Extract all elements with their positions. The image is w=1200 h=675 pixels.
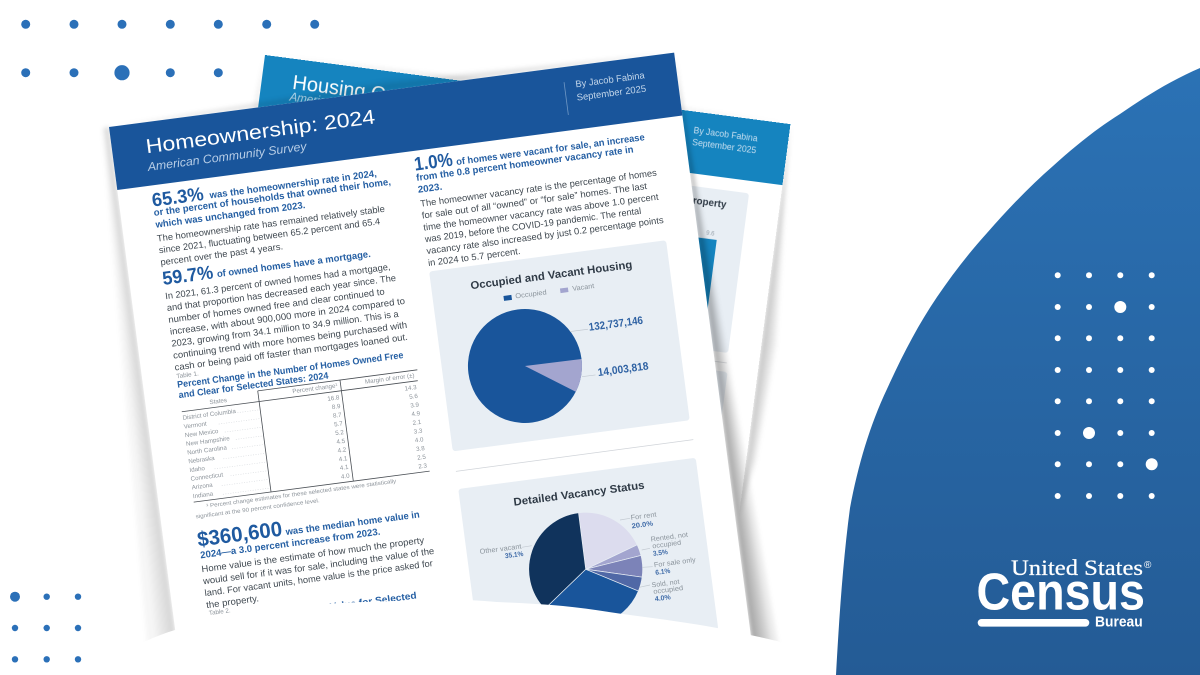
- main page subtitle: American Community Survey: [146, 139, 308, 174]
- back page title: Housing Costs: 2024: [291, 72, 478, 118]
- table 1: homes owned free and clear: Percent change¹: [292, 382, 338, 395]
- stat: 65.3% homeownership rate: was the homeownership rate in 2024,: [208, 168, 378, 202]
- table 1: homes owned free and clear: significant at the 90 percent confidence level.: [195, 498, 321, 520]
- stat: 65.3% homeownership rate: which was unchanged from 2023.: [154, 200, 306, 231]
- stat: 65.3% homeownership rate: or the percent of households that owned their home,: [153, 177, 392, 219]
- label: for sale only: For sale only: [654, 557, 697, 569]
- table 1: homes owned free and clear: 5.2: [335, 429, 345, 437]
- pie chart: vacancy status: [529, 512, 643, 626]
- table 1: homes owned free and clear: North Carolina: [187, 444, 228, 457]
- table 1: homes owned free and clear: 2.1: [412, 419, 422, 427]
- table 1: homes owned free and clear: Idaho: [189, 465, 206, 474]
- text: homeownership rate explanation: since 2021, fluctuating between 65.2 percent and 65.4: [158, 216, 381, 255]
- table 1: homes owned free and clear: Arizona: [191, 482, 214, 491]
- stat: 1.0% vacant for sale: 1.0%: [413, 150, 454, 176]
- table 1: homes owned free and clear: ¹ Percent change estimates for these selected states were statistically: [206, 479, 397, 510]
- label: for sale only: 6.1%: [655, 568, 671, 577]
- label: for rent: 20.0%: [631, 521, 654, 530]
- table 1: homes owned free and clear: 4.9: [411, 410, 421, 418]
- main page title: Homeownership: 2024: [145, 106, 376, 158]
- back page byline: [691, 125, 758, 155]
- stat: 65.3% homeownership rate: 65.3%: [151, 184, 205, 212]
- text: vacancy explanation: for sale out of all “owned” or “for sale” homes. The last: [421, 181, 648, 221]
- label: other vacant: Other vacant: [479, 543, 522, 556]
- text: home value explanation: the property.: [206, 593, 259, 610]
- text: homeownership rate explanation: [156, 204, 389, 267]
- chart title: Detailed Vacancy Status: [513, 480, 645, 509]
- table 1: homes owned free and clear: [176, 342, 433, 521]
- text: vacancy explanation: was 2019, before the COVID-19 pandemic. The rental: [423, 206, 642, 244]
- text: vacancy explanation: vacancy rate also increased by just 0.2 percentage points: [426, 215, 665, 256]
- label: for rent: For rent: [630, 512, 657, 522]
- value label: occupied: 132,737,146: [588, 315, 644, 334]
- table 1: homes owned free and clear: 5.6: [409, 393, 419, 401]
- text: mortgage explanation: cash or being paid off faster than mortgages loaned out.: [174, 332, 408, 372]
- label: sold, not occupied: occupied: [653, 585, 684, 596]
- table 1: homes owned free and clear: 4.2: [337, 446, 347, 455]
- table 1: homes owned free and clear: District of Columbia: [182, 408, 237, 422]
- label: rented, not occupied: Rented, not: [650, 532, 688, 544]
- table 1: homes owned free and clear: 4.0: [341, 473, 351, 481]
- panel: detailed vacancy status: [458, 458, 718, 661]
- text: home value explanation: land. For vacant units, home value is the price asked for: [204, 558, 433, 598]
- stat: 59.7% with mortgage: [161, 242, 372, 290]
- panel: occupied and vacant housing: [429, 240, 690, 451]
- right column content: [413, 123, 718, 661]
- label: other vacant: [479, 543, 525, 563]
- value label: vacant: 14,003,818: [597, 360, 649, 379]
- label: sold, not occupied: Sold, not: [651, 579, 680, 589]
- table 1: homes owned free and clear: Nebraska: [188, 455, 216, 465]
- text: vacancy explanation: in 2024 to 5.7 percent.: [427, 246, 521, 268]
- back page chart card: Median Value by Property: [607, 184, 728, 211]
- back page header: [257, 55, 790, 185]
- logo: United States Census Bureau: Bureau: [1095, 614, 1143, 630]
- curved white cover over page bottoms: [100, 600, 800, 675]
- table 1: homes owned free and clear: 5.7: [334, 420, 344, 428]
- stat: 1.0% vacant for sale: 2023.: [417, 182, 443, 196]
- text: mortgage explanation: 2023, growing from 34.1 million to 34.9 million. This is a: [171, 309, 400, 349]
- stat: 65.3% homeownership rate: [150, 160, 393, 231]
- label: sold, not occupied: 4.0%: [654, 594, 672, 603]
- back page byline: By Jacob Fabina: [693, 125, 758, 144]
- main page byline: By Jacob Fabina: [575, 70, 646, 90]
- table 1: homes owned free and clear: States: [209, 397, 227, 406]
- back page subtitle: American Community Survey: [288, 92, 439, 123]
- table 1: homes owned free and clear: 4.5: [336, 438, 346, 446]
- dot pattern: top left: [21, 20, 319, 80]
- table 1: homes owned free and clear: 4.1: [339, 464, 349, 472]
- table 1: homes owned free and clear: and Clear for Selected States: 2024: [178, 369, 330, 400]
- table 1: homes owned free and clear: 4.1: [338, 455, 348, 463]
- label: other vacant: 35.1%: [505, 551, 525, 560]
- main report page: Homeownership 2024: [102, 53, 778, 661]
- pie chart: occupied vs vacant: [461, 302, 589, 430]
- stat: 1.0% vacant for sale: [413, 124, 648, 196]
- stat: 59.7% with mortgage: of owned homes have a mortgage.: [216, 249, 371, 280]
- back report page: Housing Costs: [194, 48, 806, 622]
- table 2 heading, partly hidden: Table 2.: [209, 607, 231, 617]
- table 1: homes owned free and clear: Percent Change in the Number of Homes Owned Free: [176, 349, 404, 390]
- table 2 heading, partly hidden: Change in Median Home Value for Selected: [209, 589, 417, 627]
- chart legend: Occupied: [515, 289, 547, 300]
- table 1: homes owned free and clear: 8.7: [333, 412, 343, 420]
- table 1: homes owned free and clear: Indiana: [193, 491, 214, 500]
- table 1: homes owned free and clear: New Hampshire: [186, 435, 231, 448]
- text: home value explanation: [200, 534, 438, 610]
- table 1: homes owned free and clear: Connecticut: [190, 472, 224, 483]
- stat: $360,600 median home value: 2024—a 3.0 percent increase from 2023.: [200, 527, 381, 561]
- text: mortgage explanation: number of homes owned free and clear continued to: [168, 286, 385, 325]
- logo: United States Census Bureau: Census: [976, 563, 1145, 621]
- table 1: homes owned free and clear: 4.0: [415, 436, 425, 444]
- back page chart card: [433, 154, 749, 353]
- table 1: homes owned free and clear: Margin of error (±): [365, 372, 415, 386]
- text: mortgage explanation: and that proportion has decreased each year since. The: [166, 273, 396, 313]
- label: rented, not occupied: [650, 532, 690, 558]
- chart legend: Vacant: [572, 283, 595, 293]
- main page byline: [574, 70, 648, 104]
- text: mortgage explanation: In 2021, 61.3 percent of owned homes had a mortgage,: [165, 262, 391, 301]
- stat: $360,600 median home value: was the median home value in: [284, 509, 420, 538]
- table 1: homes owned free and clear: 14.3: [404, 384, 418, 393]
- chart title: Occupied and Vacant Housing: [470, 259, 633, 292]
- table 1: homes owned free and clear: Table 1.: [176, 370, 199, 380]
- text: vacancy explanation: The homeowner vacancy rate is the percentage of homes: [420, 168, 658, 209]
- table 1: homes owned free and clear: 8.9: [331, 403, 341, 411]
- text: homeownership rate explanation: percent over the past 4 years.: [160, 241, 284, 267]
- text: vacancy explanation: [419, 168, 666, 268]
- text: mortgage explanation: [165, 260, 410, 372]
- back page byline: September 2025: [692, 137, 757, 155]
- table 1: homes owned free and clear: Vermont: [183, 421, 207, 431]
- label: rented, not occupied: occupied: [652, 540, 682, 550]
- blue curved panel: [836, 68, 1200, 675]
- text: homeownership rate explanation: The homeownership rate has remained relatively stable: [156, 204, 385, 244]
- table 1: homes owned free and clear: 2.3: [418, 462, 428, 470]
- table 1: homes owned free and clear: New Mexico: [185, 428, 219, 439]
- table 1: homes owned free and clear: 2.5: [417, 454, 427, 462]
- stat: $360,600 median home value: $360,600: [196, 518, 284, 552]
- stat: 1.0% vacant for sale: of homes were vacant for sale, an increase: [456, 132, 645, 168]
- dot pattern: bottom left: [10, 592, 81, 662]
- chart legend: [503, 283, 595, 302]
- logo: United States Census Bureau: ®: [1144, 560, 1152, 571]
- back page chart card: 9.6: [706, 231, 715, 238]
- text: home value explanation: would sell for if it was for sale, including the value of the: [201, 546, 435, 586]
- main page byline: September 2025: [576, 84, 647, 104]
- label: sold, not occupied: [651, 578, 685, 603]
- table 1: homes owned free and clear: 3.8: [416, 445, 426, 453]
- text: home value explanation: Home value is the estimate of how much the property: [201, 535, 425, 574]
- stat: $360,600 median home value: [196, 500, 422, 561]
- table 1: homes owned free and clear: 16.8: [327, 394, 340, 403]
- text: mortgage explanation: continuing trend with more homes being purchased with: [172, 320, 408, 361]
- left column content: [150, 159, 447, 628]
- stat: 59.7% with mortgage: 59.7%: [161, 262, 215, 290]
- table 1: homes owned free and clear: 3.9: [410, 401, 420, 410]
- label: for rent: [630, 512, 658, 530]
- text: vacancy explanation: time the homeowner vacancy rate was above 1.0 percent: [423, 192, 659, 233]
- text: mortgage explanation: increase, with about 900,000 more in 2024 compared to: [169, 296, 406, 337]
- main page header: [109, 53, 682, 190]
- label: rented, not occupied: 3.5%: [653, 549, 669, 558]
- dot pattern: right panel: [1055, 272, 1158, 499]
- logo: United States Census Bureau: United States: [1011, 555, 1143, 580]
- table 1: homes owned free and clear: 3.3: [413, 428, 423, 436]
- label: for sale only: [654, 557, 698, 577]
- back page second card: [408, 333, 728, 541]
- stat: 1.0% vacant for sale: from the 0.8 percent homeowner vacancy rate in: [416, 144, 634, 184]
